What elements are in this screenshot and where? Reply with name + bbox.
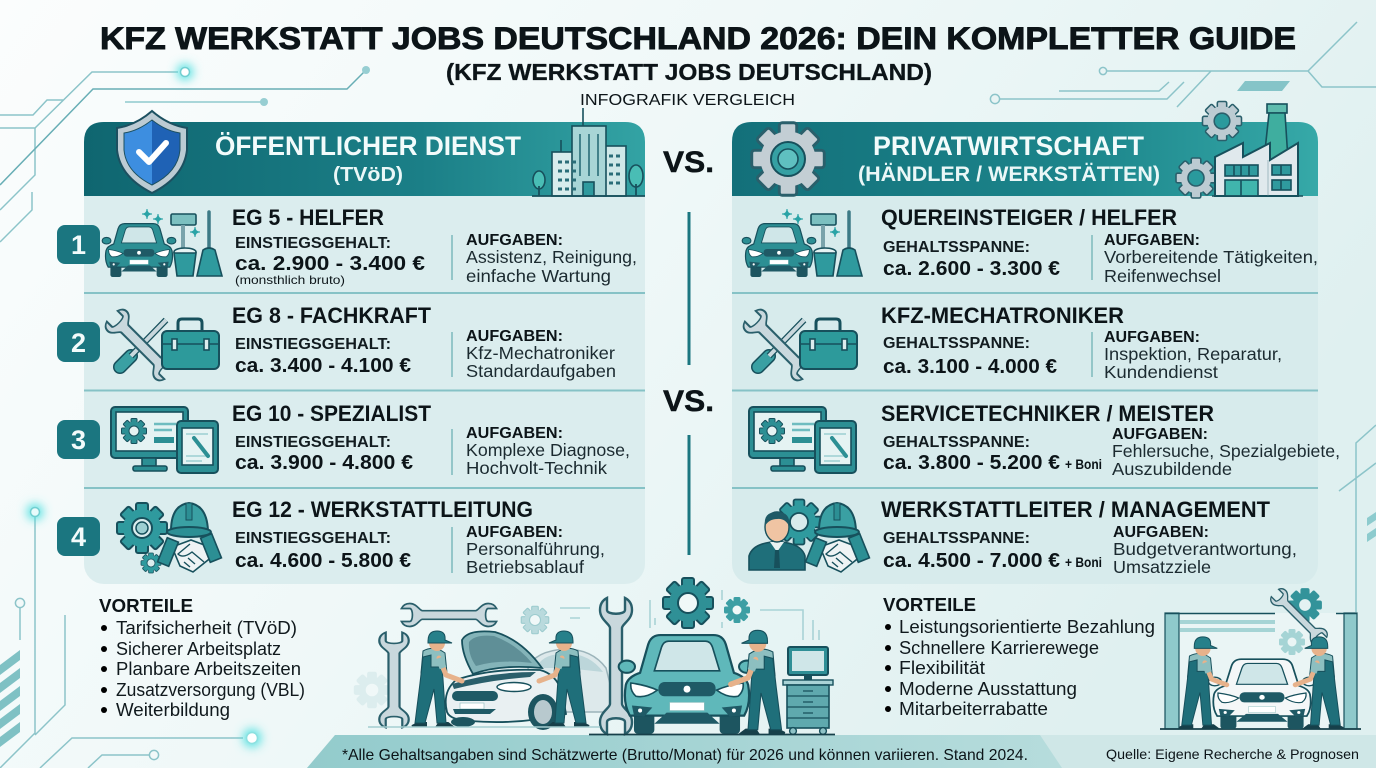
floor lines [368,726,600,728]
benefits: public sector [99,596,305,720]
worker right [1295,637,1343,728]
tasks [1104,329,1282,382]
benefits: private sector: Moderne Ausstattung [899,679,1077,699]
salary value: ca. 2.900 - 3.400 € [235,252,426,275]
divider [451,332,453,377]
tasks: AUFGABEN: [1112,426,1208,443]
header heading: ÖFFENTLICHER DIENST [215,131,521,161]
benefits: private sector: Leistungsorientierte Bezahlung [899,617,1155,637]
tasks [466,425,630,478]
tasks [466,524,605,577]
divider [451,429,453,475]
row title: EG 12 - WERKSTATTLEITUNG [232,497,533,522]
salary label: EINSTIEGSGEHALT: [235,235,391,252]
tasks: AUFGABEN: [1104,329,1200,346]
worker with diagnostic cart [731,630,785,733]
footnote: *Alle Gehaltsangaben sind Schätzwerte (Brutto/Monat) für 2026 und können variieren. Stand 2024. [342,747,1028,764]
tasks: Fehlersuche, Spezialgebiete, [1112,441,1340,461]
tasks [466,328,616,381]
number badge 1 [57,225,100,264]
tasks: Standardaufgaben [466,361,616,381]
row 2: EG 8 Fachkraft [103,303,616,383]
row title: SERVICETECHNIKER / MEISTER [881,401,1214,426]
row title: WERKSTATTLEITER / MANAGEMENT [881,497,1271,522]
worker left [1179,637,1227,728]
row 3: EG 10 Spezialist [111,401,630,478]
salary value: ca. 3.900 - 4.800 € [235,451,414,474]
tasks: Personalführung, [466,539,605,559]
row 4: EG 12 Werkstattleitung [117,497,605,577]
panel header [84,122,645,196]
icon: gears, helmet and handshake [117,503,221,573]
icon: wrench and toolbox [103,307,219,383]
bonus note: + Boni [1065,457,1102,472]
tasks [1112,426,1340,479]
salary label: GEHALTSSPANNE: [883,434,1030,451]
icon: manager, gear, helmet and handshake [749,500,869,572]
benefits: public sector: Tarifsicherheit (TVöD) [116,618,297,638]
white car [1208,659,1316,729]
salary label: GEHALTSSPANNE: [883,530,1030,547]
small gear [724,598,750,622]
tasks: Budgetverantwortung, [1113,539,1297,559]
tasks: AUFGABEN: [466,328,563,345]
panel body [732,122,1318,584]
salary label: GEHALTSSPANNE: [883,239,1030,256]
tasks: Reifenwechsel [1104,266,1221,286]
panel body [84,122,645,584]
salary value: ca. 3.400 - 4.100 € [235,354,412,377]
benefits: public sector: Weiterbildung [116,700,230,720]
number badge 4: 4 [71,522,86,552]
title: KFZ WERKSTATT JOBS DEUTSCHLAND 2026: DEIN KOMPLETTER GUIDE [100,20,1296,56]
tasks [1113,524,1297,577]
benefits: private sector: Flexibilität [899,658,985,678]
tasks: Kfz-Mechatroniker [466,343,615,363]
number badge 1: 1 [71,230,86,260]
worker left [412,631,462,726]
worker right [539,631,589,726]
panel header [732,122,1318,196]
center divider line [688,212,690,555]
icon: city buildings [532,108,645,196]
horizontal wrench [401,603,497,627]
benefits: public sector: Zusatzversorgung (VBL) [116,680,305,700]
number badge 2 [57,322,100,362]
illustration: garage scene [1160,586,1361,729]
icon: factory with gears [1176,102,1303,198]
panel: Öffentlicher Dienst [84,108,645,584]
garage frame [1160,613,1361,729]
header subheading: (TVöD) [333,164,403,186]
salary value: ca. 4.500 - 7.000 € [883,549,1061,572]
wrench [1268,586,1330,648]
sparkle lines [560,590,819,640]
tasks: Auszubildende [1112,459,1232,479]
tasks: AUFGABEN: [1113,524,1209,541]
number badge 3: 3 [71,425,86,455]
tasks [1104,232,1318,286]
tasks: Inspektion, Reparatur, [1104,344,1282,364]
header heading: PRIVATWIRTSCHAFT [873,131,1145,161]
salary label: EINSTIEGSGEHALT: [235,434,391,451]
number badge 3 [57,420,100,459]
benefits: private sector [883,595,1155,719]
number badge 4 [57,517,100,556]
VS top: VS. [663,146,714,179]
tasks: AUFGABEN: [466,524,563,541]
left wrench [379,632,409,728]
row title: EG 8 - FACHKRAFT [232,303,432,328]
header subheading: (HÄNDLER / WERKSTÄTTEN) [858,163,1160,186]
benefits: public sector: VORTEILE [99,596,193,616]
salary label: EINSTIEGSGEHALT: [235,530,391,547]
benefits: private sector: Schnellere Karrierewege [899,638,1099,658]
tasks: einfache Wartung [466,266,611,286]
salary value: ca. 4.600 - 5.800 € [235,549,412,572]
divider [451,235,453,280]
icon: shield [117,111,187,193]
bonus note: + Boni [1065,555,1102,570]
salary value: ca. 2.600 - 3.300 € [883,257,1061,280]
number badge 2: 2 [71,328,86,358]
tasks: Hochvolt-Technik [466,458,607,478]
row dividers [732,293,1318,488]
tasks: Vorbereitende Tätigkeiten, [1104,247,1318,267]
label: Infografik Vergleich: INFOGRAFIK VERGLEICH [580,92,795,109]
divider [1091,332,1093,377]
tasks: Kundendienst [1104,362,1218,382]
salary value: ca. 3.100 - 4.000 € [883,355,1058,378]
icon: large gear [752,123,824,195]
salary value: ca. 3.800 - 5.200 € [883,451,1061,474]
row title: EG 5 - HELFER [232,205,384,230]
row title: QUEREINSTEIGER / HELFER [881,205,1177,230]
benefits: private sector: VORTEILE [883,595,976,615]
panel: Privatwirtschaft [732,102,1340,584]
source: Quelle: Eigene Recherche & Prognosen [1106,746,1359,762]
row 1: EG 5 Helfer [102,205,637,287]
footer band highlight [307,735,1062,768]
tasks: AUFGABEN: [466,425,563,442]
row dividers [84,293,645,488]
tasks: AUFGABEN: [1104,232,1200,249]
row title: EG 10 - SPEZIALIST [232,401,432,426]
icon: car and cleaning tools [742,209,862,277]
row 1: Quereinsteiger [742,205,1318,286]
teal car [619,635,755,734]
diagnostic cart [783,647,833,734]
icon: car and cleaning tools [102,209,222,277]
icon: monitor and tablet [749,407,856,473]
benefits: private sector: Mitarbeiterrabatte [899,699,1048,719]
benefits: public sector: Sicherer Arbeitsplatz [116,639,281,659]
tasks: Umsatzziele [1113,557,1211,577]
VS middle: VS. [663,385,714,418]
row 2: Kfz-Mechatroniker [741,303,1282,383]
tasks [466,232,637,286]
illustration: central workshop scene [354,578,835,734]
row 3: Servicetechniker [749,401,1340,479]
icon: wrench and toolbox [741,307,857,383]
divider [1091,235,1093,280]
icon: monitor and tablet [111,407,218,473]
gear [1289,589,1321,621]
salary label: GEHALTSSPANNE: [883,335,1030,352]
divider [451,527,453,573]
row 4: Werkstattleiter [749,497,1297,577]
tasks: Assistenz, Reinigung, [466,247,637,267]
footer band [307,735,1376,768]
salary label: EINSTIEGSGEHALT: [235,336,391,353]
tasks: Komplexe Diagnose, [466,440,630,460]
faint gear [1280,630,1304,654]
large wrench [600,598,632,734]
faint decorative gears [354,672,390,708]
subtitle: (KFZ WERKSTATT JOBS DEUTSCHLAND) [446,59,932,85]
tasks: Betriebsablauf [466,557,584,577]
silver car with raised hood [446,631,610,730]
row title: KFZ-MECHATRONIKER [881,303,1124,328]
benefits: public sector: Planbare Arbeitszeiten [116,659,301,679]
tasks: AUFGABEN: [466,232,563,249]
large gear [663,578,713,628]
salary note: (monsthlich bruto) [235,273,345,287]
